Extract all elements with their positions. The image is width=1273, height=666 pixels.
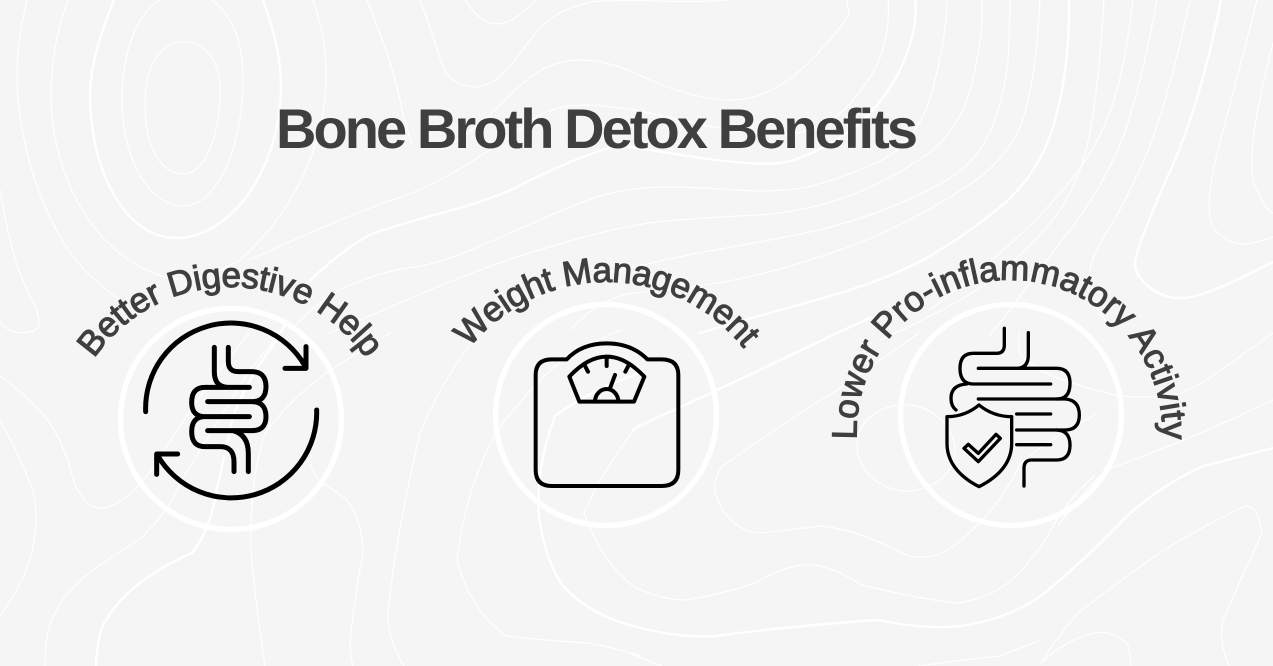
icon: shield with check [947, 405, 1012, 487]
icon: intestine with circular arrows [146, 323, 317, 498]
ring: digestive [120, 308, 342, 530]
label: better digestive help: Better Digestive Help [76, 264, 378, 357]
panel: weight management [450, 258, 760, 528]
panel: lower pro-inflammatory activity [832, 258, 1186, 528]
icon: bathroom scale [536, 343, 678, 486]
panel: better digestive help [76, 264, 378, 532]
label: weight management: Weight Management [450, 258, 760, 349]
ring: inflammation [900, 304, 1122, 526]
label: lower pro-inflammatory activity: Lower Pro-inflammatory Activity [832, 258, 1186, 440]
title: Bone Broth Detox Benefits [276, 97, 918, 160]
icon: intestine with shield [947, 328, 1079, 487]
ring: weight [496, 304, 716, 526]
